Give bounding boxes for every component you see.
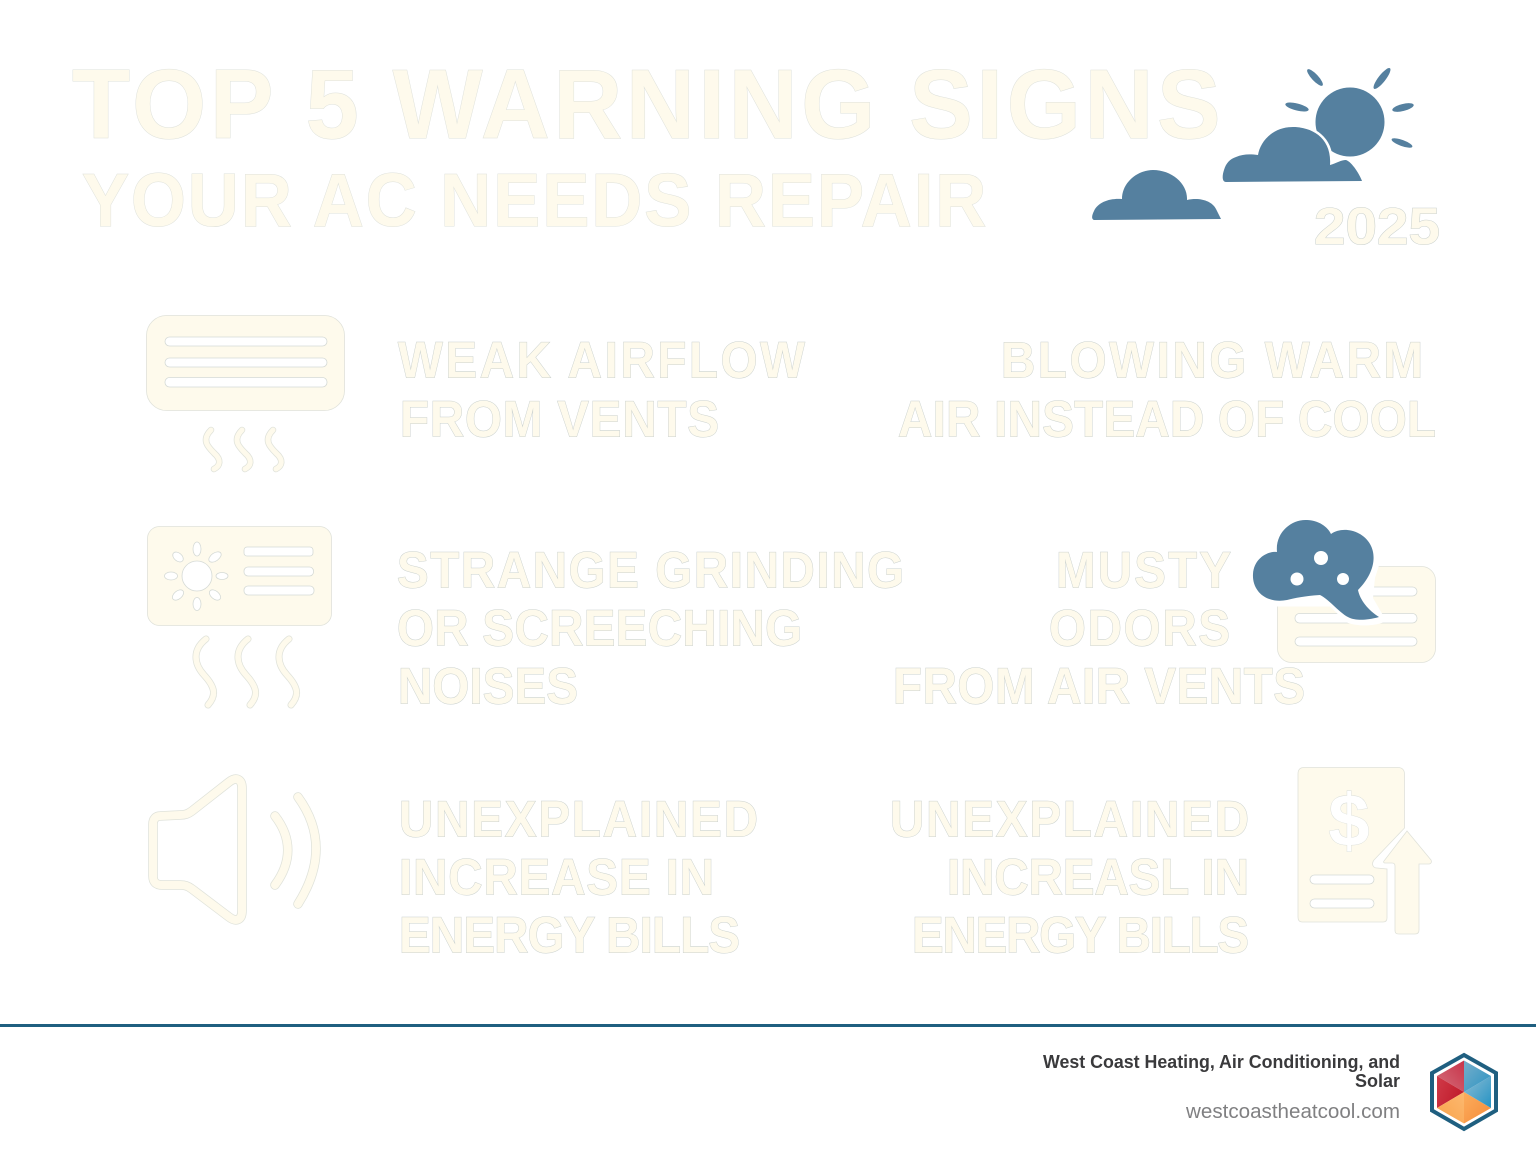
footer: company details [1043, 1052, 1400, 1123]
panel: blowing warm air: BLOWING WARM [1001, 332, 1423, 389]
text: weak airflow: FROM VENTS [400, 391, 719, 448]
icon: air vent with weak airflow [146, 316, 344, 469]
company name second line: Solar [1355, 1071, 1400, 1091]
year label: 2025 [1314, 198, 1440, 256]
icon: bill with dollar sign and up arrow [1298, 768, 1431, 934]
website: westcoastheatcool.com [1185, 1101, 1400, 1123]
title line 1: TOP 5 WARNING SIGNS [72, 51, 1220, 159]
panel: strange noises [148, 526, 904, 715]
header: title block [72, 51, 1440, 256]
text: weak airflow: WEAK AIRFLOW [398, 332, 805, 389]
text: energy bills right [890, 791, 1249, 964]
title line 2: YOUR AC NEEDS REPAIR [82, 159, 986, 242]
panel: blowing warm air [898, 332, 1436, 448]
panel: musty odors [893, 520, 1436, 715]
icon: bill with dollar sign and up arrow: $ [1328, 779, 1370, 862]
text: energy bills left [399, 791, 758, 964]
text: strange noises [397, 542, 904, 715]
text: strange noises: STRANGE GRINDING [397, 542, 904, 599]
panel: energy bills left [153, 779, 758, 964]
icon: vent with sun and heat waves [148, 526, 332, 705]
panel: blowing warm air: AIR INSTEAD OF COOL [898, 391, 1436, 448]
text: energy bills right: ENERGY BILLS [912, 907, 1249, 964]
text: energy bills right: INCREASL IN [947, 849, 1249, 906]
text: musty odors [893, 542, 1305, 715]
footer divider [0, 1024, 1536, 1027]
text: energy bills left: ENERGY BILLS [399, 907, 740, 964]
text: energy bills left: UNEXPLAINED [399, 791, 758, 848]
text: musty odors: MUSTY [1056, 542, 1231, 599]
text: energy bills left: INCREASE IN [399, 849, 714, 906]
icon: vent with odor cloud [1253, 520, 1436, 662]
text: weak airflow [398, 332, 805, 448]
icon: sun behind clouds [1092, 66, 1415, 220]
panel: energy bills right [890, 768, 1431, 964]
text: musty odors: FROM AIR VENTS [893, 658, 1305, 715]
text: musty odors: ODORS [1049, 600, 1230, 657]
logo: hexagon [1432, 1055, 1496, 1129]
text: strange noises: OR SCREECHING [397, 600, 802, 657]
text: energy bills right: UNEXPLAINED [890, 791, 1249, 848]
panel: weak airflow [146, 316, 805, 469]
text: strange noises: NOISES [398, 658, 578, 715]
icon: speaker with sound waves [153, 779, 316, 920]
company name: West Coast Heating, Air Conditioning, and [1043, 1052, 1400, 1072]
